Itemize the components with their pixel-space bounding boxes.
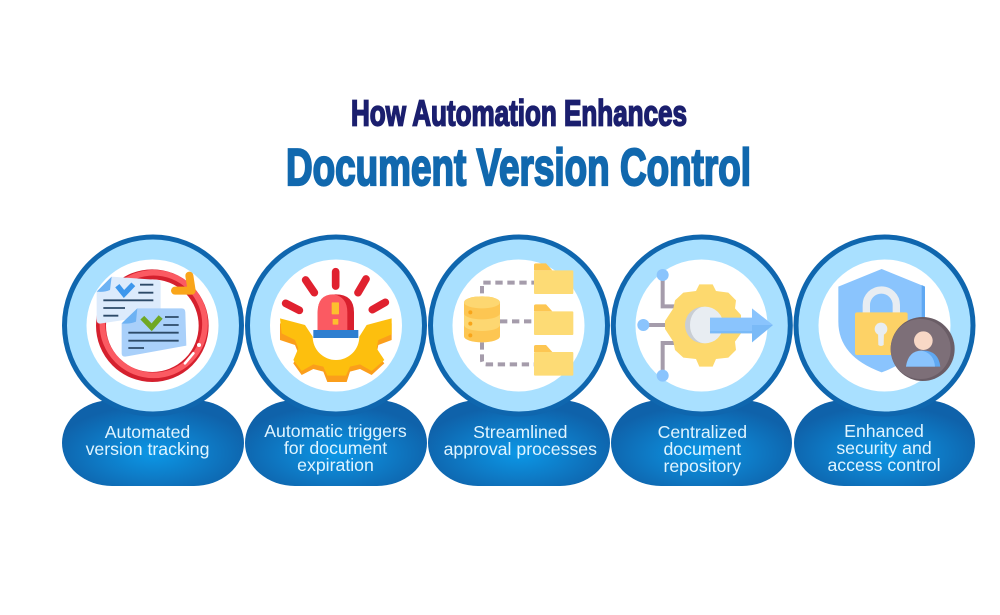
heading line 1: How Automation Enhances (351, 92, 687, 134)
heading line 2: Document Version Control (286, 139, 751, 197)
circle badge (248, 237, 424, 414)
label text: Centralized (658, 422, 747, 442)
label text: for document (284, 438, 387, 458)
icon: database and folders (464, 263, 573, 376)
label text: version tracking (86, 439, 209, 459)
circle badge (613, 237, 790, 414)
label text: approval processes (444, 439, 597, 459)
circle badge (64, 237, 242, 414)
panel: enhanced security (794, 237, 975, 486)
label text: Streamlined (473, 422, 567, 442)
panel: automatic triggers (245, 237, 427, 486)
label text: Automatic triggers (264, 421, 407, 441)
panel: automated version tracking (62, 237, 244, 486)
panel: streamlined approval (428, 237, 610, 486)
label pill (245, 400, 427, 486)
icon: gear hub with arrow (637, 269, 773, 382)
label pill (62, 400, 244, 486)
icon: documents with circular arrow (97, 273, 205, 377)
label text: Automated (105, 422, 190, 442)
label pill (428, 400, 610, 486)
label text: security and (836, 438, 932, 458)
label text: document (663, 439, 741, 459)
label text: Enhanced (844, 421, 924, 441)
label pill (794, 400, 975, 486)
circle badge (430, 237, 608, 414)
icon: shield, lock and user (838, 269, 955, 381)
label pill (611, 400, 792, 486)
title (286, 92, 751, 197)
icon: alarm and gear (280, 272, 392, 382)
label text: repository (663, 456, 741, 476)
label text: access control (827, 455, 941, 475)
panel: centralized repository (611, 237, 792, 486)
circle badge (796, 237, 973, 414)
label text: expiration (297, 455, 374, 475)
